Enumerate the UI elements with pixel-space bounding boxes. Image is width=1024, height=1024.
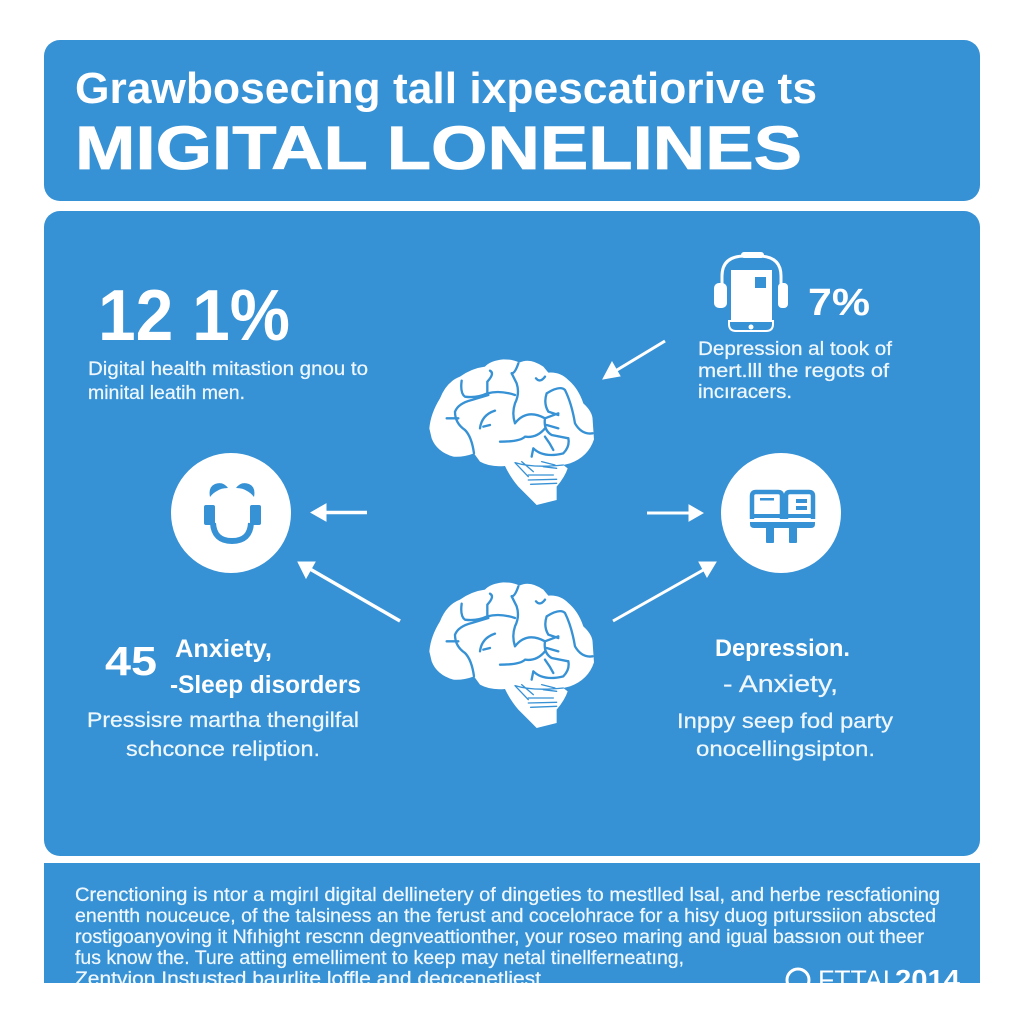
icon: lower brain [429, 582, 594, 728]
stat: 7 percent: incıracers. [698, 382, 792, 403]
stat: 45 with conditions: -Sleep disorders [170, 671, 361, 699]
stat: 45 with conditions [87, 635, 361, 761]
stat: 45 with conditions: Anxiety, [175, 635, 272, 663]
stat: 121 percent: minital leatih men. [88, 383, 245, 404]
stat: 45 with conditions: 45 [105, 638, 157, 684]
stat: depression and anxiety: - Anxiety, [723, 671, 838, 698]
icon: tablet with headphones [714, 252, 788, 331]
arrow: lower left [298, 562, 400, 621]
icon circle: kiosk screens [721, 453, 841, 573]
arrow: left to headset [311, 504, 367, 521]
panel: header [44, 40, 980, 201]
icon circle: headset [171, 453, 291, 573]
stat: depression and anxiety: onocellingsipton. [696, 738, 875, 761]
stat: 121 percent: Digital health mitastion gnou to [88, 359, 368, 380]
footer logo: 2014 [895, 964, 960, 995]
arrow: right to kiosk [647, 505, 703, 521]
stat: 45 with conditions: schconce reliption. [126, 738, 320, 761]
footer logo: FTTAI [818, 965, 890, 995]
stat: 121 percent: 12 1% [98, 276, 290, 356]
title line one: Grawbosecing tall ixpescatiorive ts [75, 64, 817, 113]
panel: main [44, 211, 980, 856]
icon: upper brain [429, 359, 594, 505]
stat: depression and anxiety: Inppy seep fod party [677, 710, 894, 733]
stat: depression and anxiety [677, 635, 894, 761]
footer paragraph: rostigoanyoving it Nfıhight rescnn degnveattionther, your roseo maring and igual bassıon out theer [75, 927, 925, 948]
stat: 7 percent: Depression al took of [698, 339, 893, 360]
stat: depression and anxiety: Depression. [715, 635, 850, 662]
footer paragraph [75, 885, 940, 990]
title line two: MIGITAL LONELINES [75, 114, 802, 182]
stat: 45 with conditions: Pressisre martha thengilfal [87, 709, 359, 732]
footer paragraph: fus know the. Ture atting emelliment to keep may netal tinellferneatıng, [75, 948, 684, 969]
stat: 7 percent: 7% [808, 282, 870, 324]
arrow: lower right [613, 562, 716, 621]
stat: 7 percent: mert.lll the regots of [698, 361, 890, 382]
footer paragraph: Zentvion Instusted baurlite loffle and deqcenetliest [75, 969, 542, 990]
footer paragraph: Crenctioning is ntor a mgirıl digital dellinetery of dingeties to mestlled lsal, and herbe rescfationing [75, 885, 940, 906]
stat: 7 percent [698, 282, 893, 403]
footer logo [787, 964, 960, 995]
panel: footer [44, 863, 980, 995]
stat: 121 percent [88, 276, 368, 404]
bottom white margin [0, 983, 1024, 1024]
arrow: to upper brain [603, 341, 665, 379]
footer paragraph: enentth nouceuce, of the talsiness an the ferust and cocelohrace for a hisy duog pıturssiion abscted [75, 906, 936, 927]
